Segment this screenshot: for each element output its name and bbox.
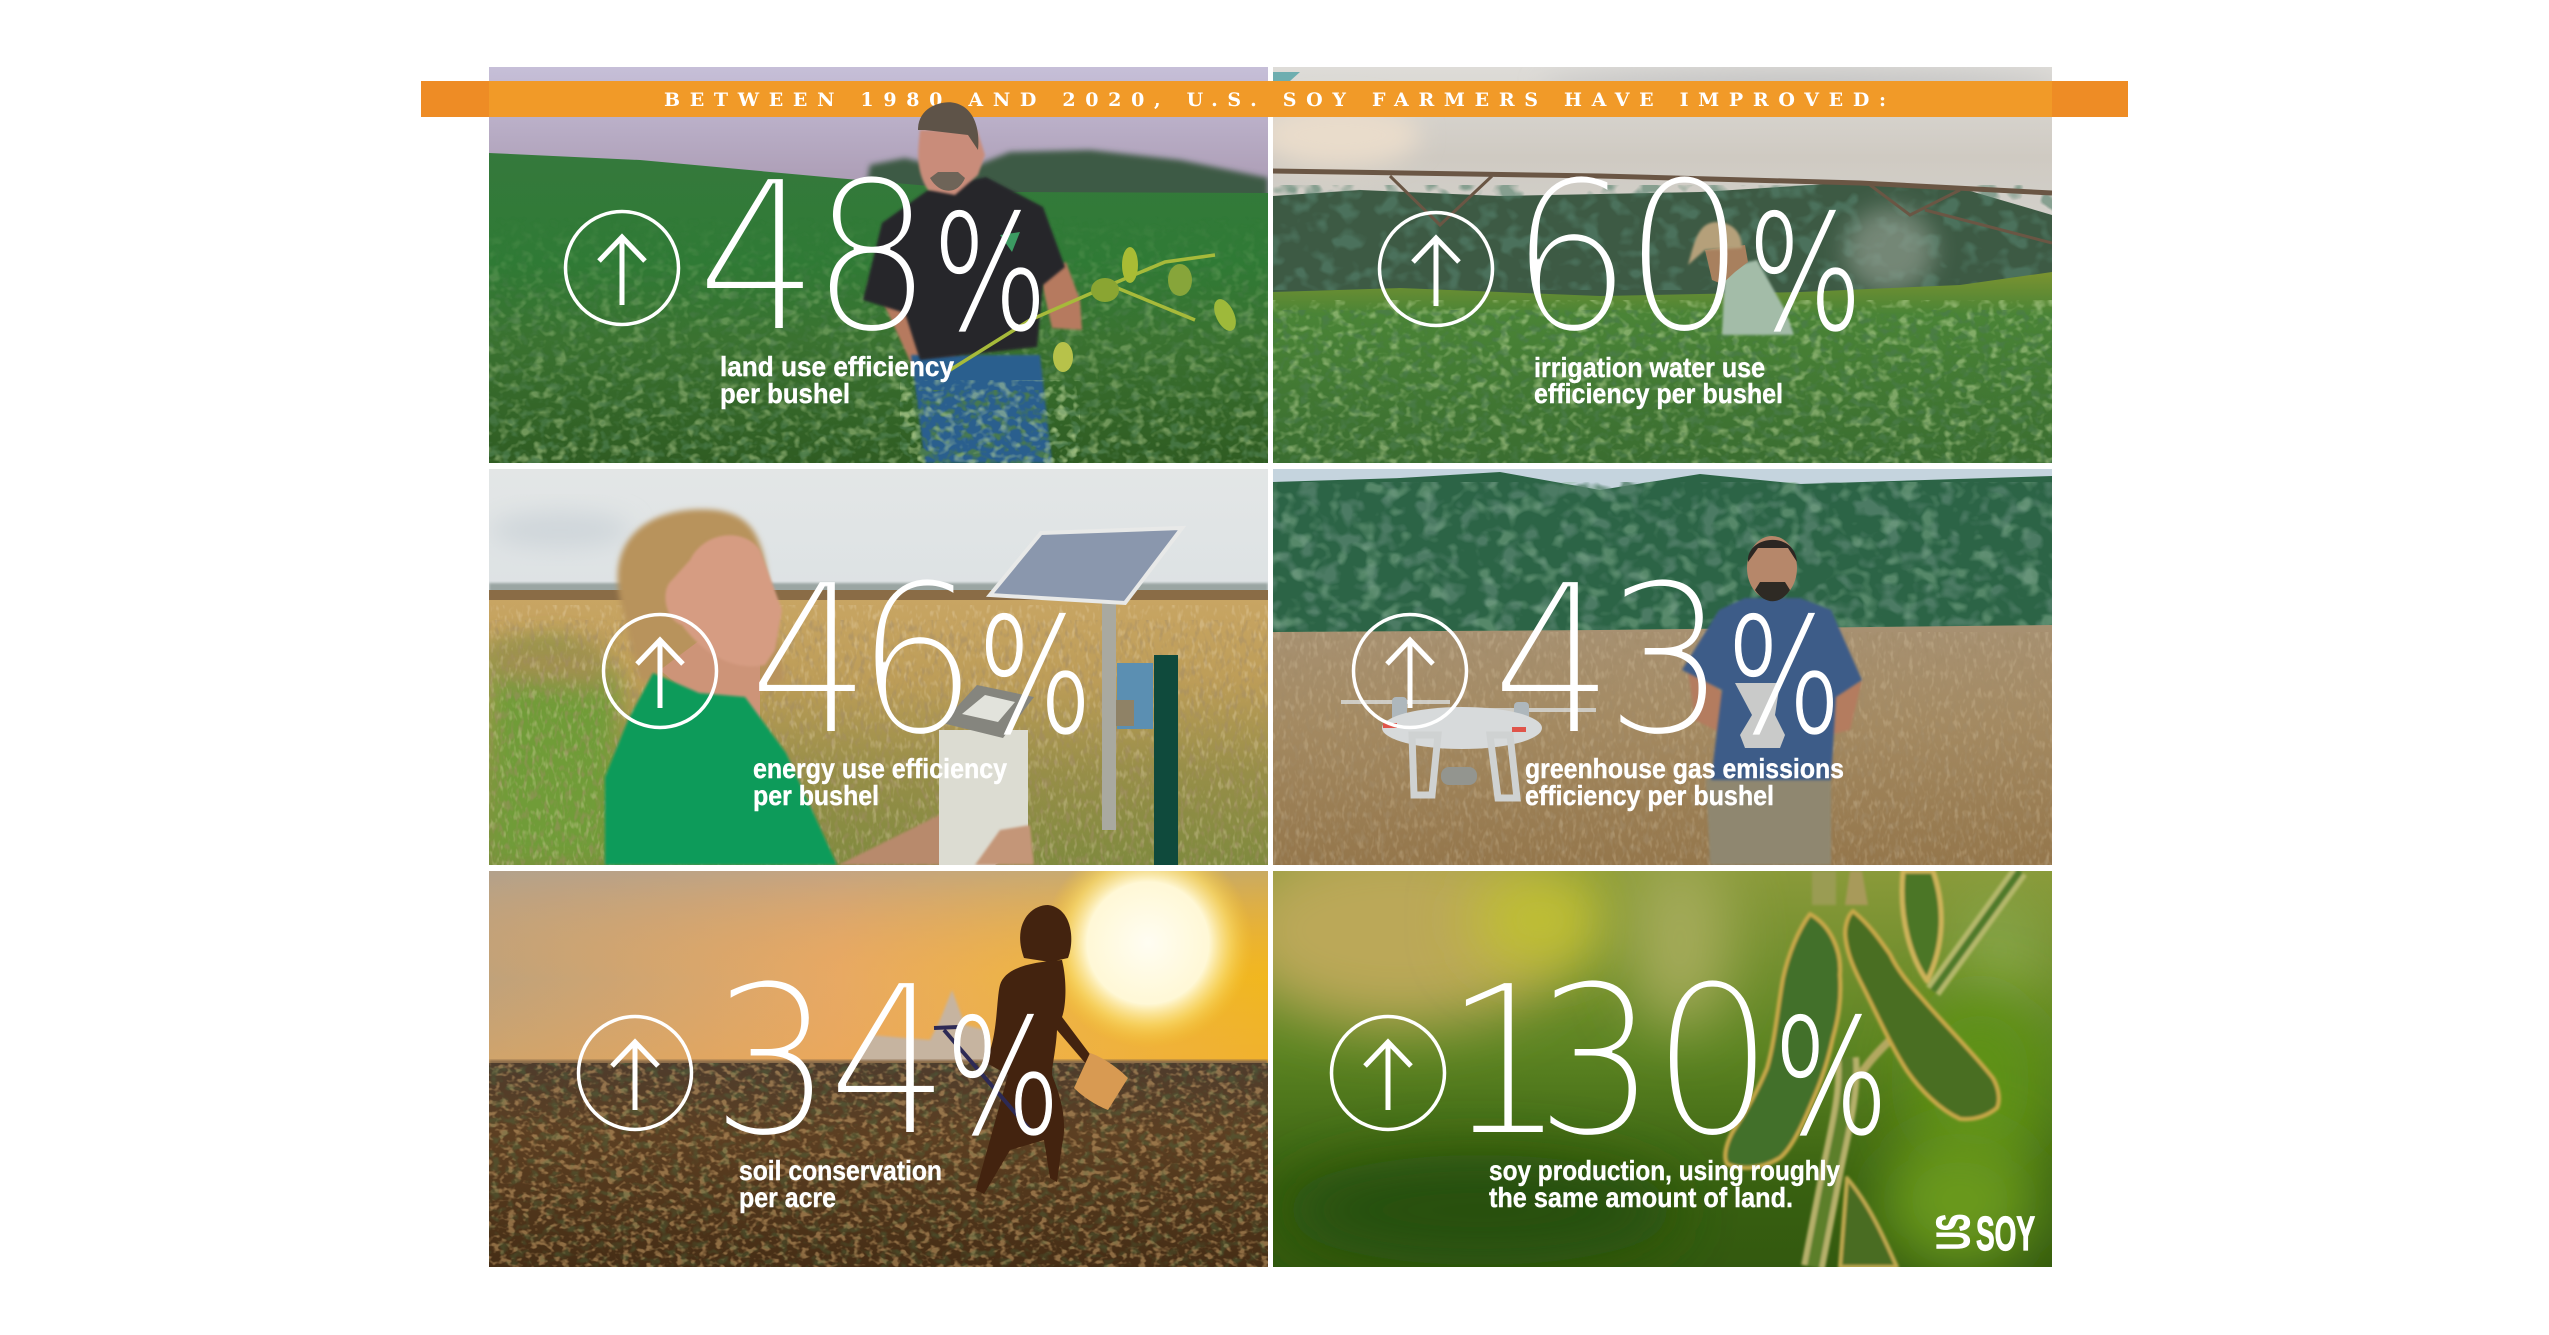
header band: [421, 81, 2128, 117]
big number 43%: 3: [1605, 540, 1727, 782]
caption: per bushel: [720, 378, 850, 409]
stat: 46%: [604, 540, 1093, 811]
panel: soy production: [1230, 835, 2052, 1270]
photo: solar panel on pole: [990, 528, 1182, 830]
big number 130%: [1444, 941, 1889, 1183]
stat: 34%: [578, 941, 1061, 1213]
big number 34%: [711, 941, 1061, 1183]
icon: up arrow in circle: [578, 1016, 692, 1130]
panel: greenhouse gas emissions efficiency: [1273, 469, 2052, 865]
stat: 60%: [1380, 137, 1863, 409]
caption: land use efficiency: [720, 351, 954, 382]
stat: 130%: [1332, 941, 1889, 1213]
icon: up arrow in circle: [1354, 614, 1466, 728]
photo: soybean field at dusk: [489, 67, 1268, 463]
big number 130%: 0: [1652, 941, 1774, 1183]
big number 48%: [697, 137, 1048, 379]
photo: farmer's head overlapping the band: [918, 102, 985, 195]
panel: irrigation water use efficiency: [1260, 67, 2060, 463]
icon: up arrow in circle: [566, 212, 678, 324]
stat: 43%: [1354, 540, 1844, 811]
photo: silhouetted woman with bucket: [934, 905, 1128, 1194]
header text: BETWEEN 1980 AND 2020, U.S. SOY FARMERS HAVE IMPROVED:: [664, 89, 1886, 111]
big number 34%: %: [945, 984, 1061, 1171]
big number 48%: 8: [811, 137, 933, 379]
caption: [1534, 352, 1783, 409]
photo: sunset over stubble field: [489, 838, 1268, 1267]
big number 46%: %: [977, 583, 1093, 770]
caption: per acre: [739, 1182, 836, 1213]
caption: efficiency per bushel: [1534, 378, 1783, 409]
caption: per bushel: [753, 780, 879, 811]
caption: energy use efficiency: [753, 753, 1007, 784]
caption: irrigation water use: [1534, 352, 1765, 383]
photo: farmer in black polo: [863, 177, 1082, 463]
caption: [1525, 753, 1844, 811]
photo: tree line above soybean field: [1273, 469, 2052, 865]
big number 46%: 6: [856, 540, 978, 782]
big number 34%: 4: [828, 941, 950, 1183]
logo: US SOY: SOY: [1976, 1208, 2035, 1261]
big number 43%: [1492, 540, 1842, 782]
caption: [720, 351, 954, 409]
photo: soybean pods: [1725, 871, 2020, 1267]
photo: woman in green polo: [605, 509, 965, 865]
big number 43%: 4: [1492, 540, 1614, 782]
panel: soil conservation: [489, 838, 1268, 1267]
caption: greenhouse gas emissions: [1525, 753, 1844, 784]
photo: farmer in cap and check shirt: [1688, 222, 1794, 335]
big number 48%: 4: [697, 137, 819, 379]
icon: up arrow in circle: [604, 614, 716, 728]
big number 60%: 0: [1624, 137, 1746, 379]
photo: soybean branch: [950, 247, 1240, 372]
logo: US SOY: [1927, 1208, 2035, 1261]
photo: field with solar panel: [489, 469, 1268, 865]
panel: energy use efficiency: [489, 469, 1268, 865]
big number 43%: %: [1726, 583, 1842, 770]
caption: [739, 1155, 942, 1213]
caption: the same amount of land.: [1489, 1182, 1793, 1213]
big number 130%: 1: [1444, 941, 1566, 1183]
photo: blurred green background: [1230, 835, 2052, 1270]
photo: weather station box: [939, 685, 1034, 865]
icon: up arrow in circle: [1380, 212, 1492, 326]
stat: 48%: [566, 137, 1048, 409]
caption: efficiency per bushel: [1525, 780, 1774, 811]
big number 60%: %: [1747, 180, 1863, 367]
big number 46%: 4: [749, 540, 871, 782]
photo: centre pivot irrigation pipe: [1273, 171, 2052, 243]
caption: soy production, using roughly: [1489, 1155, 1840, 1186]
logo: US SOY: US: [1927, 1214, 1979, 1250]
caption: [1489, 1155, 1840, 1213]
big number 130%: 3: [1535, 941, 1657, 1183]
photo: white drone: [1341, 697, 1596, 798]
big number 60%: [1510, 137, 1863, 379]
big number 48%: %: [932, 180, 1048, 367]
photo: farmer in blue t-shirt: [1682, 536, 1862, 865]
big number 130%: %: [1773, 984, 1889, 1171]
photo: irrigated soybean field: [1260, 67, 2060, 463]
panel: land use efficiency: [489, 67, 1268, 463]
big number 60%: 6: [1510, 137, 1632, 379]
photo: green post and trail camera: [1116, 655, 1178, 865]
caption: [753, 753, 1007, 811]
icon: up arrow in circle: [1332, 1016, 1444, 1130]
big number 34%: 3: [711, 941, 833, 1183]
caption: soil conservation: [739, 1155, 942, 1186]
big number 46%: [749, 540, 1093, 782]
